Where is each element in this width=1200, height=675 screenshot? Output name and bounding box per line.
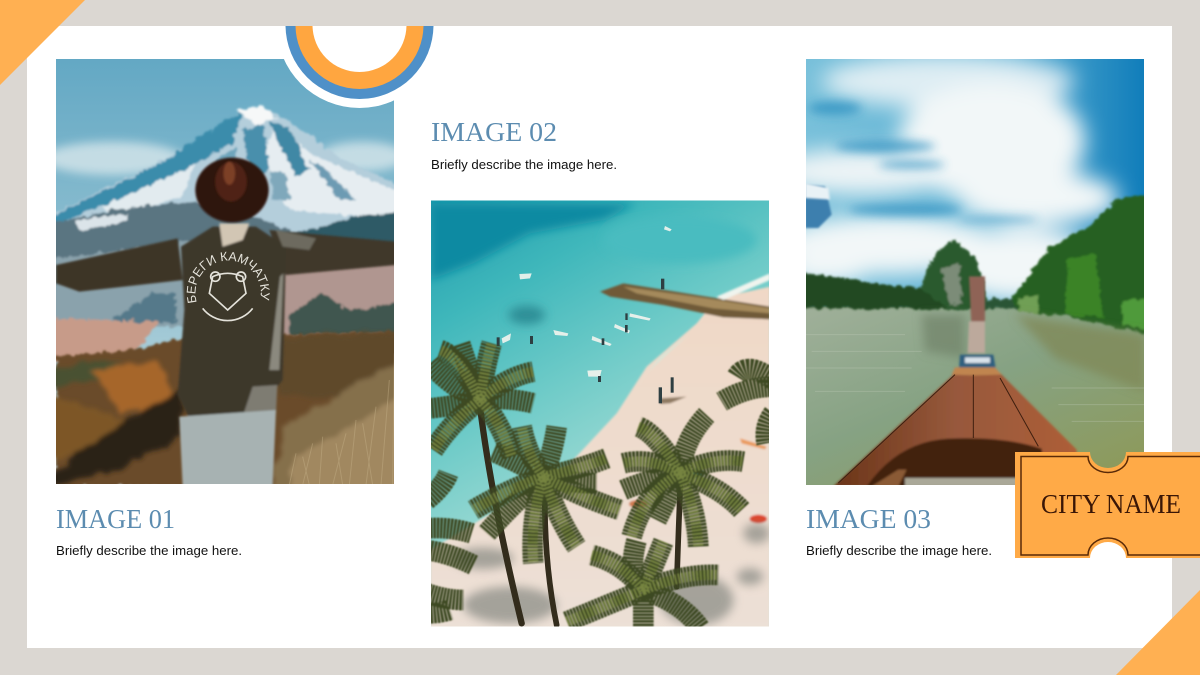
person (56, 223, 396, 487)
description: image 01: Briefly describe the image here. (56, 544, 242, 558)
grass blades (289, 353, 394, 485)
description: image 02: Briefly describe the image here. (431, 158, 617, 172)
sand shadows (453, 523, 770, 625)
shirt logo: БЕРЕГИ КАМЧАТКУ (186, 252, 270, 303)
photo: tropical beach (427, 200, 773, 628)
mountain (49, 106, 403, 363)
heading: image 02: IMAGE 02 (431, 117, 557, 147)
palm fronds, light leaflets (433, 343, 743, 622)
decorative half circle (284, 26, 434, 108)
photo: longtail boat on river (806, 59, 1144, 485)
heading: image 01: IMAGE 01 (56, 504, 175, 534)
trunks (480, 407, 681, 625)
corner triangle: bottom right (1116, 590, 1200, 675)
palm fronds, dark leaflets (427, 343, 773, 628)
swimmers and boards (502, 226, 672, 377)
description: image 03: Briefly describe the image here. (806, 544, 992, 558)
ticket: city name (1015, 452, 1200, 558)
photo: hiker and volcano (56, 59, 394, 484)
heading: image 03: IMAGE 03 (806, 504, 931, 534)
ground (56, 332, 396, 487)
hat (195, 158, 269, 222)
ticket label: CITY NAME (1041, 489, 1181, 519)
corner triangle: top left (0, 0, 85, 85)
